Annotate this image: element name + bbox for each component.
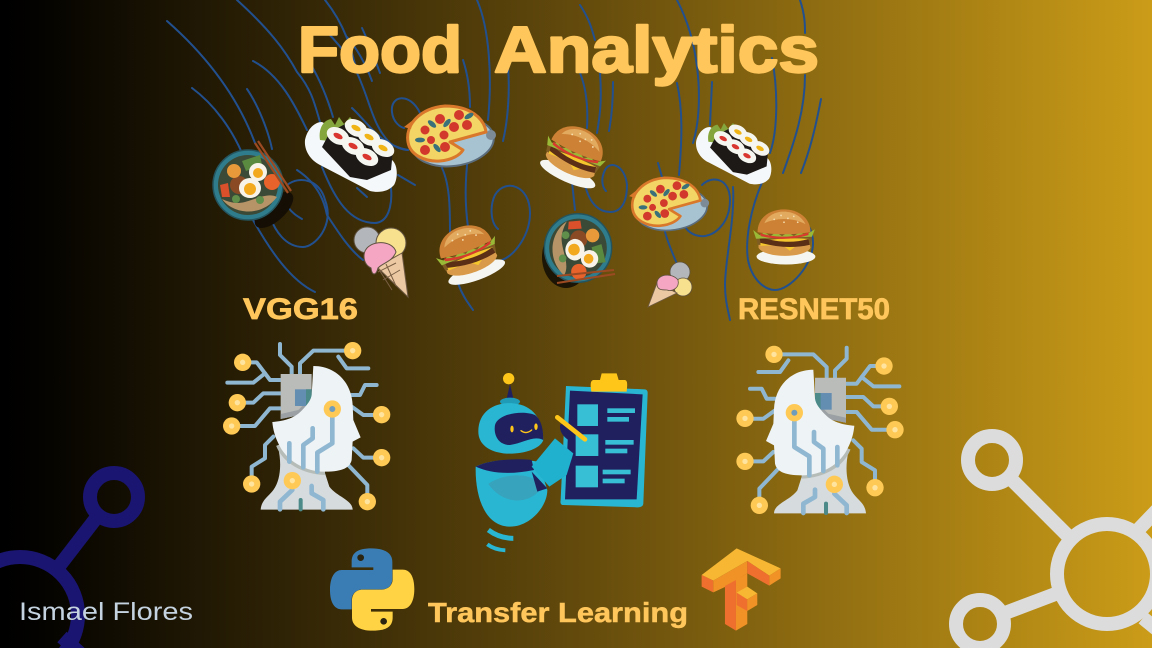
icon: AI head right [736, 346, 904, 514]
icon: ramen bowl left [213, 141, 299, 234]
icon: robot with clipboard [476, 373, 648, 550]
icon: pizza right [629, 178, 710, 235]
title: Food [298, 13, 462, 86]
icon: burger right [755, 209, 815, 264]
icon: burger top [535, 117, 615, 194]
icon: ramen bowl centre [542, 211, 615, 288]
title: Analytics [494, 13, 819, 86]
flowing blue curves [167, 0, 821, 320]
icon: AI head left [223, 342, 390, 510]
icon: ice cream right [648, 262, 692, 307]
heading: RESNET50: RESNET50 [738, 293, 890, 326]
text: author name: Ismael Flores [19, 598, 193, 626]
icon: TensorFlow logo [702, 548, 781, 631]
icon: Python logo [330, 548, 414, 631]
icon: burger left centre [430, 217, 508, 291]
network icon: navy bottom left [0, 473, 138, 648]
icon: pizza top [404, 106, 497, 171]
heading: VGG16: VGG16 [243, 293, 358, 326]
icon: sushi plate left [305, 115, 397, 192]
icon: ice cream left [354, 227, 408, 297]
network icon: grey bottom right [956, 436, 1152, 648]
text: Transfer Learning: Transfer Learning [428, 597, 688, 628]
icon: sushi plate right [696, 122, 772, 184]
title [298, 13, 819, 86]
